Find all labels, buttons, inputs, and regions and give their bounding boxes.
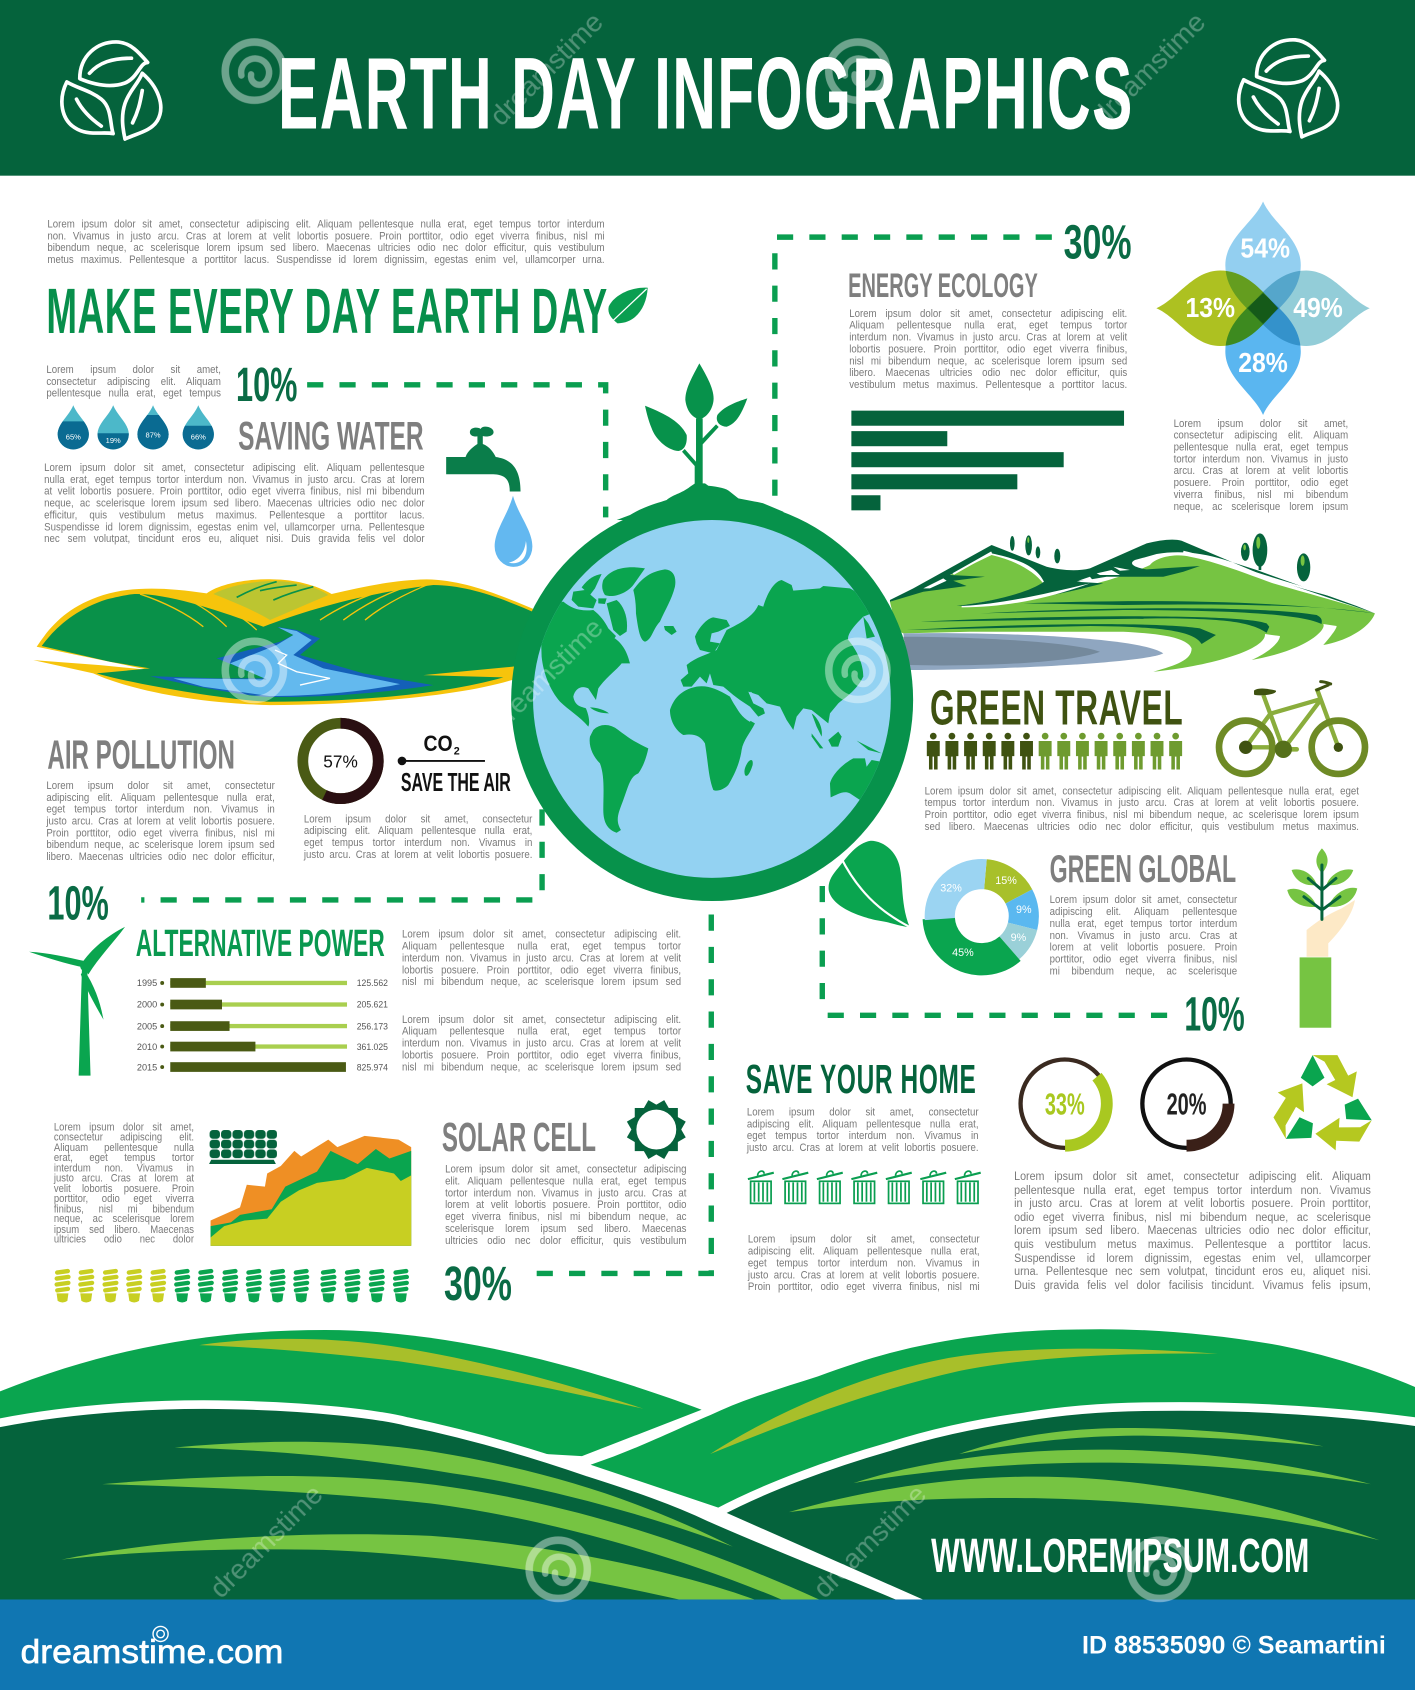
text block: under petals: viverra finibus, nisl mi bibendum [1174, 489, 1348, 501]
text block: saving water [44, 462, 425, 545]
text block: above drops [46, 364, 221, 399]
callout: CO2 save the air [398, 731, 511, 797]
text block: left of solar chart: finibus, nisl mi bibendum [54, 1204, 194, 1215]
stat: 10 percent green global: 10% [1184, 987, 1245, 1041]
bar chart: alternative power by year: 256.173 [357, 1021, 388, 1031]
footer logo text: dreamstime.com [20, 1634, 283, 1671]
text block: left of solar chart: consectetur adipiscing elit. [54, 1132, 194, 1144]
watermark overlay: dreamstime [807, 1478, 932, 1604]
watermark overlay: dreamstime [483, 612, 609, 737]
text block: air pollution: adipiscing elit. Aliquam pellentesque nulla erat, [46, 792, 275, 804]
icon: recycle [1264, 1055, 1378, 1158]
text block: solar cell [445, 1164, 686, 1247]
water drops chart: 87% [145, 431, 161, 440]
text block: left of solar chart: erat, eget tempus tortor [54, 1153, 194, 1164]
petal chart: 28% [1238, 347, 1288, 378]
text block: saving water: Suspendisse id lorem dignissim, egestas enim vel, ullamcorper urna. Pellentesque [44, 521, 425, 533]
text block: under petals: arcu. Cras at lorem at velit lobortis [1174, 465, 1348, 477]
text block: solar cell: elit. Aliquam pellentesque nulla erat, eget tempus [445, 1176, 686, 1188]
illustration: left hills and river [33, 579, 540, 705]
bar chart: energy [851, 411, 1124, 510]
bar chart: alternative power by year: 2010 [137, 1042, 157, 1052]
heading: green global: GREEN GLOBAL [1050, 848, 1236, 891]
text block: air pollution: bibendum neque, ac scelerisque lorem ipsum sed [46, 839, 275, 851]
dashed connector: green global [822, 886, 1175, 1015]
text block: solar cell: ultricies odio nec dolor efficitur, quis vestibulum [445, 1235, 686, 1247]
text block: left of solar chart: justo arcu. Cras at lorem at [54, 1173, 194, 1185]
watermark overlay: dreamstime [483, 6, 609, 131]
dashed connector: solar [537, 905, 711, 1273]
text block: recycle: lorem ipsum sed libero. Maecenas ultricies odio nec dolor efficitur, [1014, 1225, 1371, 1238]
illustration: right hills and lake [890, 533, 1375, 672]
text block: intro: metus maximus. Pellentesque a porttitor lacus. Suspendisse id lorem dignissim, egestas enim vel, ullamcorper urna. [47, 254, 605, 266]
bar chart: alternative power by year: 125.562 [357, 978, 388, 988]
heading: air pollution: AIR POLLUTION [47, 731, 235, 777]
text block: alternative power one [402, 929, 681, 988]
icon: wind turbine [29, 927, 125, 1076]
donut chart: green global [921, 855, 1043, 977]
bar chart: alternative power by year: 2005 [137, 1021, 157, 1031]
text block: green global: lorem at velit lobortis posuere. Proin [1050, 941, 1237, 953]
text block: under petals: neque, ac scelerisque lorem ipsum [1174, 501, 1348, 512]
bar chart: alternative power by year [137, 978, 388, 1072]
text block: save the air: adipiscing elit. Aliquam pellentesque nulla erat, [304, 826, 532, 837]
text block: save your home one: justo arcu. Cras at lorem at velit lobortis posuere. [747, 1142, 979, 1154]
text block: recycle: pellentesque nulla erat, eget tempus tortor interdum non. Vivamus [1014, 1184, 1371, 1197]
text block: saving water: nec sem volutpat, tincidunt eros eu, aliquet nisi. Duis gravida felis vel dolor [44, 533, 425, 545]
text block: save your home one [746, 1106, 979, 1154]
text block: green global: mi bibendum neque, ac scelerisque [1050, 965, 1237, 977]
text block: alternative power two: Aliquam pellentesque nulla erat, eget tempus tortor [402, 1026, 681, 1037]
text block: intro [47, 218, 605, 266]
text block: save the air [304, 814, 532, 861]
text block: air pollution: Proin porttitor, odio eget viverra finibus, nisl mi [46, 827, 275, 839]
icon row: light bulbs [54, 1269, 409, 1303]
text block: saving water: neque, ac scelerisque lorem ipsum sed libero. Maecenas ultricies odio nec dolor [44, 497, 425, 509]
text block: air pollution: eget tempus tortor interdum non. Vivamus in [46, 804, 275, 815]
text block: save the air: eget tempus tortor interdum non. Vivamus in [304, 837, 532, 849]
text block: under petals: tortor interdum non. Vivamus in justo [1174, 453, 1348, 465]
bar chart: alternative power by year: 2015 [137, 1062, 157, 1072]
donut: 57 percent: 57% [323, 751, 358, 771]
text block: alternative power two: lobortis posuere. Proin porttitor, odio eget viverra finibus, [402, 1049, 681, 1061]
ring: 20 percent [1142, 1059, 1231, 1148]
text block: saving water: at velit lobortis posuere. Proin porttitor, odio eget viverra finibus, nisl mi bibendum [44, 486, 425, 497]
icon: hand holding plant [1287, 848, 1357, 1028]
text block: above drops: Lorem ipsum dolor sit amet, [46, 364, 221, 376]
bar chart: alternative power by year: 2000 [137, 1000, 157, 1010]
text block: under petals: Lorem ipsum dolor sit amet, [1174, 418, 1348, 430]
text block: save the air: justo arcu. Cras at lorem at velit lobortis posuere. [304, 849, 532, 861]
dashed connector: saving water [307, 385, 606, 517]
text block: recycle: urna. Pellentesque nec sem volutpat, tincidunt eros eu, aliquet nisi. [1014, 1266, 1371, 1278]
text block: solar cell: tortor interdum non. Vivamus in justo arcu. Cras at [445, 1188, 686, 1200]
text block: air pollution: justo arcu. Cras at lorem at velit lobortis posuere. [46, 815, 275, 827]
text block: left of solar chart: velit lobortis posuere. Proin [54, 1183, 194, 1195]
text block: alternative power one: Lorem ipsum dolor sit amet, consectetur adipiscing elit. [402, 929, 681, 940]
donut chart: green global: 32% [940, 882, 962, 894]
header banner [0, 0, 1415, 176]
text block: under petals: posuere. Proin porttitor, odio eget [1174, 477, 1348, 489]
text block: alternative power one: nisl mi bibendum neque, ac scelerisque lorem ipsum sed [402, 976, 681, 988]
donut: 57 percent [303, 723, 378, 799]
text block: energy ecology [849, 308, 1128, 391]
text block: green travel [924, 785, 1359, 833]
donut chart: green global: 9% [1011, 932, 1027, 944]
text block: intro: Lorem ipsum dolor sit amet, consectetur adipiscing elit. Aliquam pellentesque nulla erat, eget tempus tortor interdum [47, 218, 605, 230]
text block: intro: bibendum neque, ac scelerisque lorem ipsum sed libero. Maecenas ultricies odio nec dolor efficitur, quis vestibulum [47, 242, 605, 254]
text block: recycle [1014, 1171, 1371, 1292]
water drops chart [58, 405, 214, 449]
text block: green travel: tempus tortor interdum non. Vivamus in justo arcu. Cras at lorem at velit lobortis posuere. [925, 797, 1359, 809]
icon: recycling leaves left [62, 42, 161, 139]
petal chart: 54% [1240, 233, 1290, 264]
text block: solar cell: Lorem ipsum dolor sit amet, consectetur adipiscing [445, 1164, 686, 1176]
callout: CO2 save the air: CO [424, 731, 453, 756]
heading: alternative power: ALTERNATIVE POWER [136, 922, 385, 964]
text block: intro: non. Vivamus in justo arcu. Cras at lorem at velit lobortis posuere. Proin porttitor, odio eget viverra finibus, nisl mi [47, 230, 605, 242]
icon: water drop [495, 496, 532, 567]
heading: saving water: SAVING WATER [238, 414, 424, 458]
ring: 33 percent [1006, 1044, 1124, 1163]
text block: alternative power two: nisl mi bibendum neque, ac scelerisque lorem ipsum sed [402, 1061, 681, 1073]
text block: above drops: pellentesque nulla erat, eget tempus [46, 387, 221, 399]
icon: small leaf [608, 288, 648, 324]
donut chart: green global: 45% [952, 947, 974, 959]
text block: energy ecology: lobortis posuere. Proin porttitor, odio eget viverra finibus, [849, 344, 1127, 356]
text block: energy ecology: Aliquam pellentesque nulla erat, eget tempus tortor [849, 320, 1127, 332]
heading: save your home: SAVE YOUR HOME [746, 1056, 976, 1102]
icon row: trash cans [748, 1171, 981, 1203]
plant on globe [617, 363, 783, 520]
text block: green global: nulla erat, eget tempus tortor interdum [1050, 918, 1237, 930]
footer credit: ID 88535090 © Seamartini [1082, 1632, 1386, 1659]
world map land [540, 567, 890, 833]
text block: air pollution: Lorem ipsum dolor sit amet, consectetur [46, 780, 275, 792]
text block: solar cell: lorem at velit lobortis posuere. Proin porttitor, odio [445, 1200, 686, 1211]
text block: under petals: pellentesque nulla erat, eget tempus [1174, 441, 1348, 453]
text block: recycle: odio eget viverra finibus, nisl mi bibendum neque, ac scelerisque [1014, 1211, 1371, 1224]
water drops chart: 65% [66, 433, 81, 442]
area chart: solar [211, 1136, 411, 1246]
text block: left of solar chart: Lorem ipsum dolor sit amet, [54, 1122, 194, 1134]
text block: green global: adipiscing elit. Aliquam pellentesque [1050, 906, 1237, 918]
text block: save your home two: eget tempus tortor interdum non. Vivamus in [748, 1257, 980, 1269]
illustration: bottom hills [0, 1329, 1415, 1606]
stat: 30 percent energy: 30% [1064, 216, 1132, 270]
water drops chart: 66% [191, 433, 206, 442]
text block: save your home two [748, 1234, 980, 1293]
text block: saving water: Lorem ipsum dolor sit amet, consectetur adipiscing elit. Aliquam pellentesque [44, 462, 425, 474]
dashed connector: energy [775, 237, 1052, 508]
watermark overlay: dreamstime [203, 1478, 329, 1604]
text block: under petals: consectetur adipiscing elit. Aliquam [1174, 430, 1348, 441]
text block: solar cell: eget viverra finibus, nisl mi bibendum neque, ac [445, 1211, 686, 1223]
text block: left of solar chart: ipsum sed libero. Maecenas [54, 1224, 194, 1236]
donut chart: green global: 9% [1016, 904, 1032, 916]
text block: recycle: Duis gravida felis vel dolor facilisis tincidunt. Vivamus felis ipsum, [1014, 1279, 1371, 1292]
heading: solar cell: SOLAR CELL [442, 1114, 596, 1160]
petal chart [1156, 202, 1370, 415]
text block: save your home two: justo arcu. Cras at lorem at velit lobortis posuere. [748, 1269, 980, 1281]
text block: energy ecology: Lorem ipsum dolor sit amet, consectetur adipiscing elit. [849, 308, 1127, 320]
text block: above drops: consectetur adipiscing elit. Aliquam [46, 376, 221, 387]
text block: recycle: quis vestibulum metus maximus. Pellentesque a porttitor lacus. [1014, 1238, 1371, 1251]
ring: 20 percent: 20% [1167, 1088, 1207, 1121]
text block: alternative power two: Lorem ipsum dolor sit amet, consectetur adipiscing elit. [402, 1014, 681, 1026]
text block: left of solar chart: neque, ac scelerisque lorem [54, 1214, 194, 1226]
stat: 10 percent saving water: 10% [236, 358, 297, 412]
text block: air pollution [46, 780, 275, 863]
dashed connector: air [141, 809, 542, 900]
text block: recycle: in justo arcu. Cras at lorem at velit lobortis posuere. Proin porttitor, [1014, 1198, 1371, 1211]
petal chart: 13% [1185, 292, 1235, 323]
text block: save your home two: adipiscing elit. Aliquam pellentesque nulla erat, [748, 1245, 980, 1257]
footer band [0, 1599, 1415, 1690]
icon: solar panel [209, 1130, 277, 1164]
text block: save the air: Lorem ipsum dolor sit amet, consectetur [304, 814, 532, 826]
text block: recycle: Suspendisse id lorem dignissim, egestas enim vel, ullamcorper [1014, 1252, 1371, 1265]
text block: under petals [1174, 418, 1348, 512]
text block: green travel: Lorem ipsum dolor sit amet, consectetur adipiscing elit. Aliquam pellentesque nulla erat, eget [925, 785, 1359, 797]
text block: left of solar chart: ultricies odio nec dolor [54, 1234, 194, 1246]
ring: 33 percent: 33% [1045, 1088, 1085, 1121]
text block: energy ecology: interdum non. Vivamus in justo arcu. Cras at lorem at velit [849, 332, 1127, 344]
watermark overlay: dreamstime [1086, 6, 1211, 131]
bar chart: alternative power by year: 205.621 [357, 1000, 388, 1010]
stat: 10 percent alternative power: 10% [47, 876, 109, 930]
pictogram: people [927, 733, 1182, 770]
icon: bicycle [1219, 682, 1365, 774]
globe [511, 499, 913, 901]
text block: left of solar chart: Aliquam pellentesque nulla [54, 1142, 194, 1154]
text block: save your home two: Proin porttitor, odio eget viverra finibus, nisl mi [748, 1281, 980, 1293]
heading: energy ecology: ENERGY ECOLOGY [848, 267, 1038, 305]
heading: green travel: GREEN TRAVEL [930, 679, 1183, 735]
text block: green travel: sed libero. Maecenas ultricies odio nec dolor efficitur, quis vestibulum metus maximus. [925, 821, 1359, 833]
text block: alternative power two: interdum non. Vivamus in justo arcu. Cras at lorem at velit [402, 1037, 681, 1049]
text block: left of solar chart [54, 1122, 194, 1246]
text block: save your home two: Lorem ipsum dolor sit amet, consectetur [748, 1234, 980, 1245]
text block: save your home one: adipiscing elit. Aliquam pellentesque nulla erat, [747, 1118, 979, 1130]
text block: alternative power one: Aliquam pellentesque nulla erat, eget tempus tortor [402, 940, 681, 952]
text block: green travel: Proin porttitor, odio eget viverra finibus, nisl mi bibendum neque, ac scelerisque lorem ipsum [925, 809, 1359, 821]
bar chart: alternative power by year: 361.025 [357, 1042, 388, 1052]
text block: save your home one: Lorem ipsum dolor sit amet, consectetur [747, 1106, 979, 1118]
icon: recycling leaves right [1239, 40, 1338, 137]
text block: energy ecology: nisl mi bibendum neque, ac scelerisque lorem ipsum sed [849, 356, 1127, 368]
text block: green global: Lorem ipsum dolor sit amet, consectetur [1050, 894, 1237, 906]
text block: energy ecology: libero. Maecenas ultricies odio nec dolor efficitur, quis [849, 368, 1127, 379]
text block: green global: porttitor, odio eget viverra finibus, nisl [1050, 953, 1237, 965]
text block: recycle: Lorem ipsum dolor sit amet, consectetur adipiscing elit. Aliquam [1014, 1171, 1371, 1183]
text block: left of solar chart: interdum non. Vivamus in [54, 1163, 194, 1175]
bar chart: alternative power by year: 825.974 [357, 1062, 388, 1072]
donut chart: green global: 15% [995, 875, 1017, 887]
text block: alternative power one: interdum non. Vivamus in justo arcu. Cras at lorem at velit [402, 952, 681, 964]
text block: air pollution: libero. Maecenas ultricies odio nec dolor efficitur, [46, 851, 275, 863]
text block: alternative power one: lobortis posuere. Proin porttitor, odio eget viverra finibus, [402, 964, 681, 976]
text block: saving water: efficitur, quis vestibulum metus maximus. Pellentesque a porttitor lacus. [44, 509, 425, 521]
callout: CO2 save the air: 2 [454, 745, 460, 757]
icon: faucet [446, 427, 521, 491]
text block: alternative power two [402, 1014, 681, 1073]
petal chart: 49% [1293, 292, 1343, 323]
text block: green global [1050, 894, 1238, 977]
heading: make every day earth day: MAKE EVERY DAY EARTH DAY [46, 276, 608, 347]
text block: save your home one: eget tempus tortor interdum non. Vivamus in [747, 1130, 979, 1142]
icon: sun [627, 1100, 686, 1159]
text block: left of solar chart: porttitor, odio eget viverra [54, 1193, 194, 1205]
text block: energy ecology: vestibulum metus maximus. Pellentesque a porttitor lacus. [849, 379, 1127, 391]
text block: solar cell: scelerisque lorem ipsum sed libero. Maecenas [445, 1223, 686, 1235]
stat: 30 percent solar: 30% [444, 1257, 512, 1311]
bar chart: alternative power by year: 1995 [137, 978, 157, 988]
footer logo spiral [153, 1626, 168, 1642]
water drops chart: 19% [106, 436, 121, 445]
text block: saving water: nulla erat, eget tempus tortor interdum non. Vivamus in justo arcu. Cras at lorem [44, 474, 425, 486]
text block: green global: non. Vivamus in justo arcu. Cras at [1050, 930, 1237, 941]
callout: CO2 save the air: SAVE THE AIR [401, 769, 511, 797]
icon: leaf under globe [829, 841, 910, 927]
